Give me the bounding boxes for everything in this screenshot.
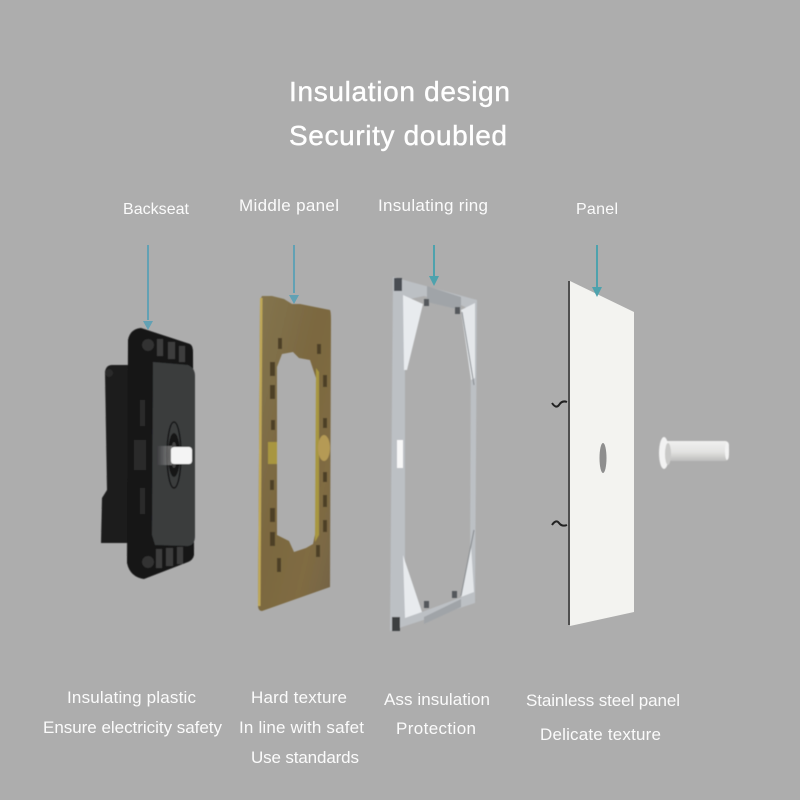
arrow: insulating ring <box>429 245 439 286</box>
label: backseat: Backseat <box>123 201 190 218</box>
component: middle panel <box>258 296 331 611</box>
description: backseat: Insulating plastic <box>67 688 196 707</box>
label: panel: Panel <box>576 201 618 218</box>
component: panel <box>552 281 634 626</box>
description: backseat <box>43 688 222 737</box>
description: backseat: Ensure electricity safety <box>43 718 222 737</box>
component: backseat <box>101 328 195 579</box>
component: insulating ring <box>390 277 477 631</box>
description: panel: Stainless steel panel <box>526 691 680 710</box>
description: middle panel <box>239 688 364 767</box>
title: Insulation design <box>289 76 510 107</box>
arrow: panel <box>592 245 602 297</box>
description: middle panel: In line with safet <box>239 718 364 737</box>
arrow: middle panel <box>289 245 299 304</box>
title: Security doubled <box>289 120 507 151</box>
title <box>289 76 510 151</box>
label: insulating ring: Insulating ring <box>378 196 488 215</box>
description: middle panel: Hard texture <box>251 688 347 707</box>
arrow: backseat <box>143 245 153 330</box>
component: switch button <box>659 437 729 469</box>
label: middle panel: Middle panel <box>239 196 339 215</box>
description: panel <box>526 691 680 744</box>
description: panel: Delicate texture <box>540 725 661 744</box>
description: insulating ring <box>384 690 490 738</box>
description: insulating ring: Protection <box>396 719 476 738</box>
description: insulating ring: Ass insulation <box>384 690 490 709</box>
description: middle panel: Use standards <box>251 748 359 767</box>
